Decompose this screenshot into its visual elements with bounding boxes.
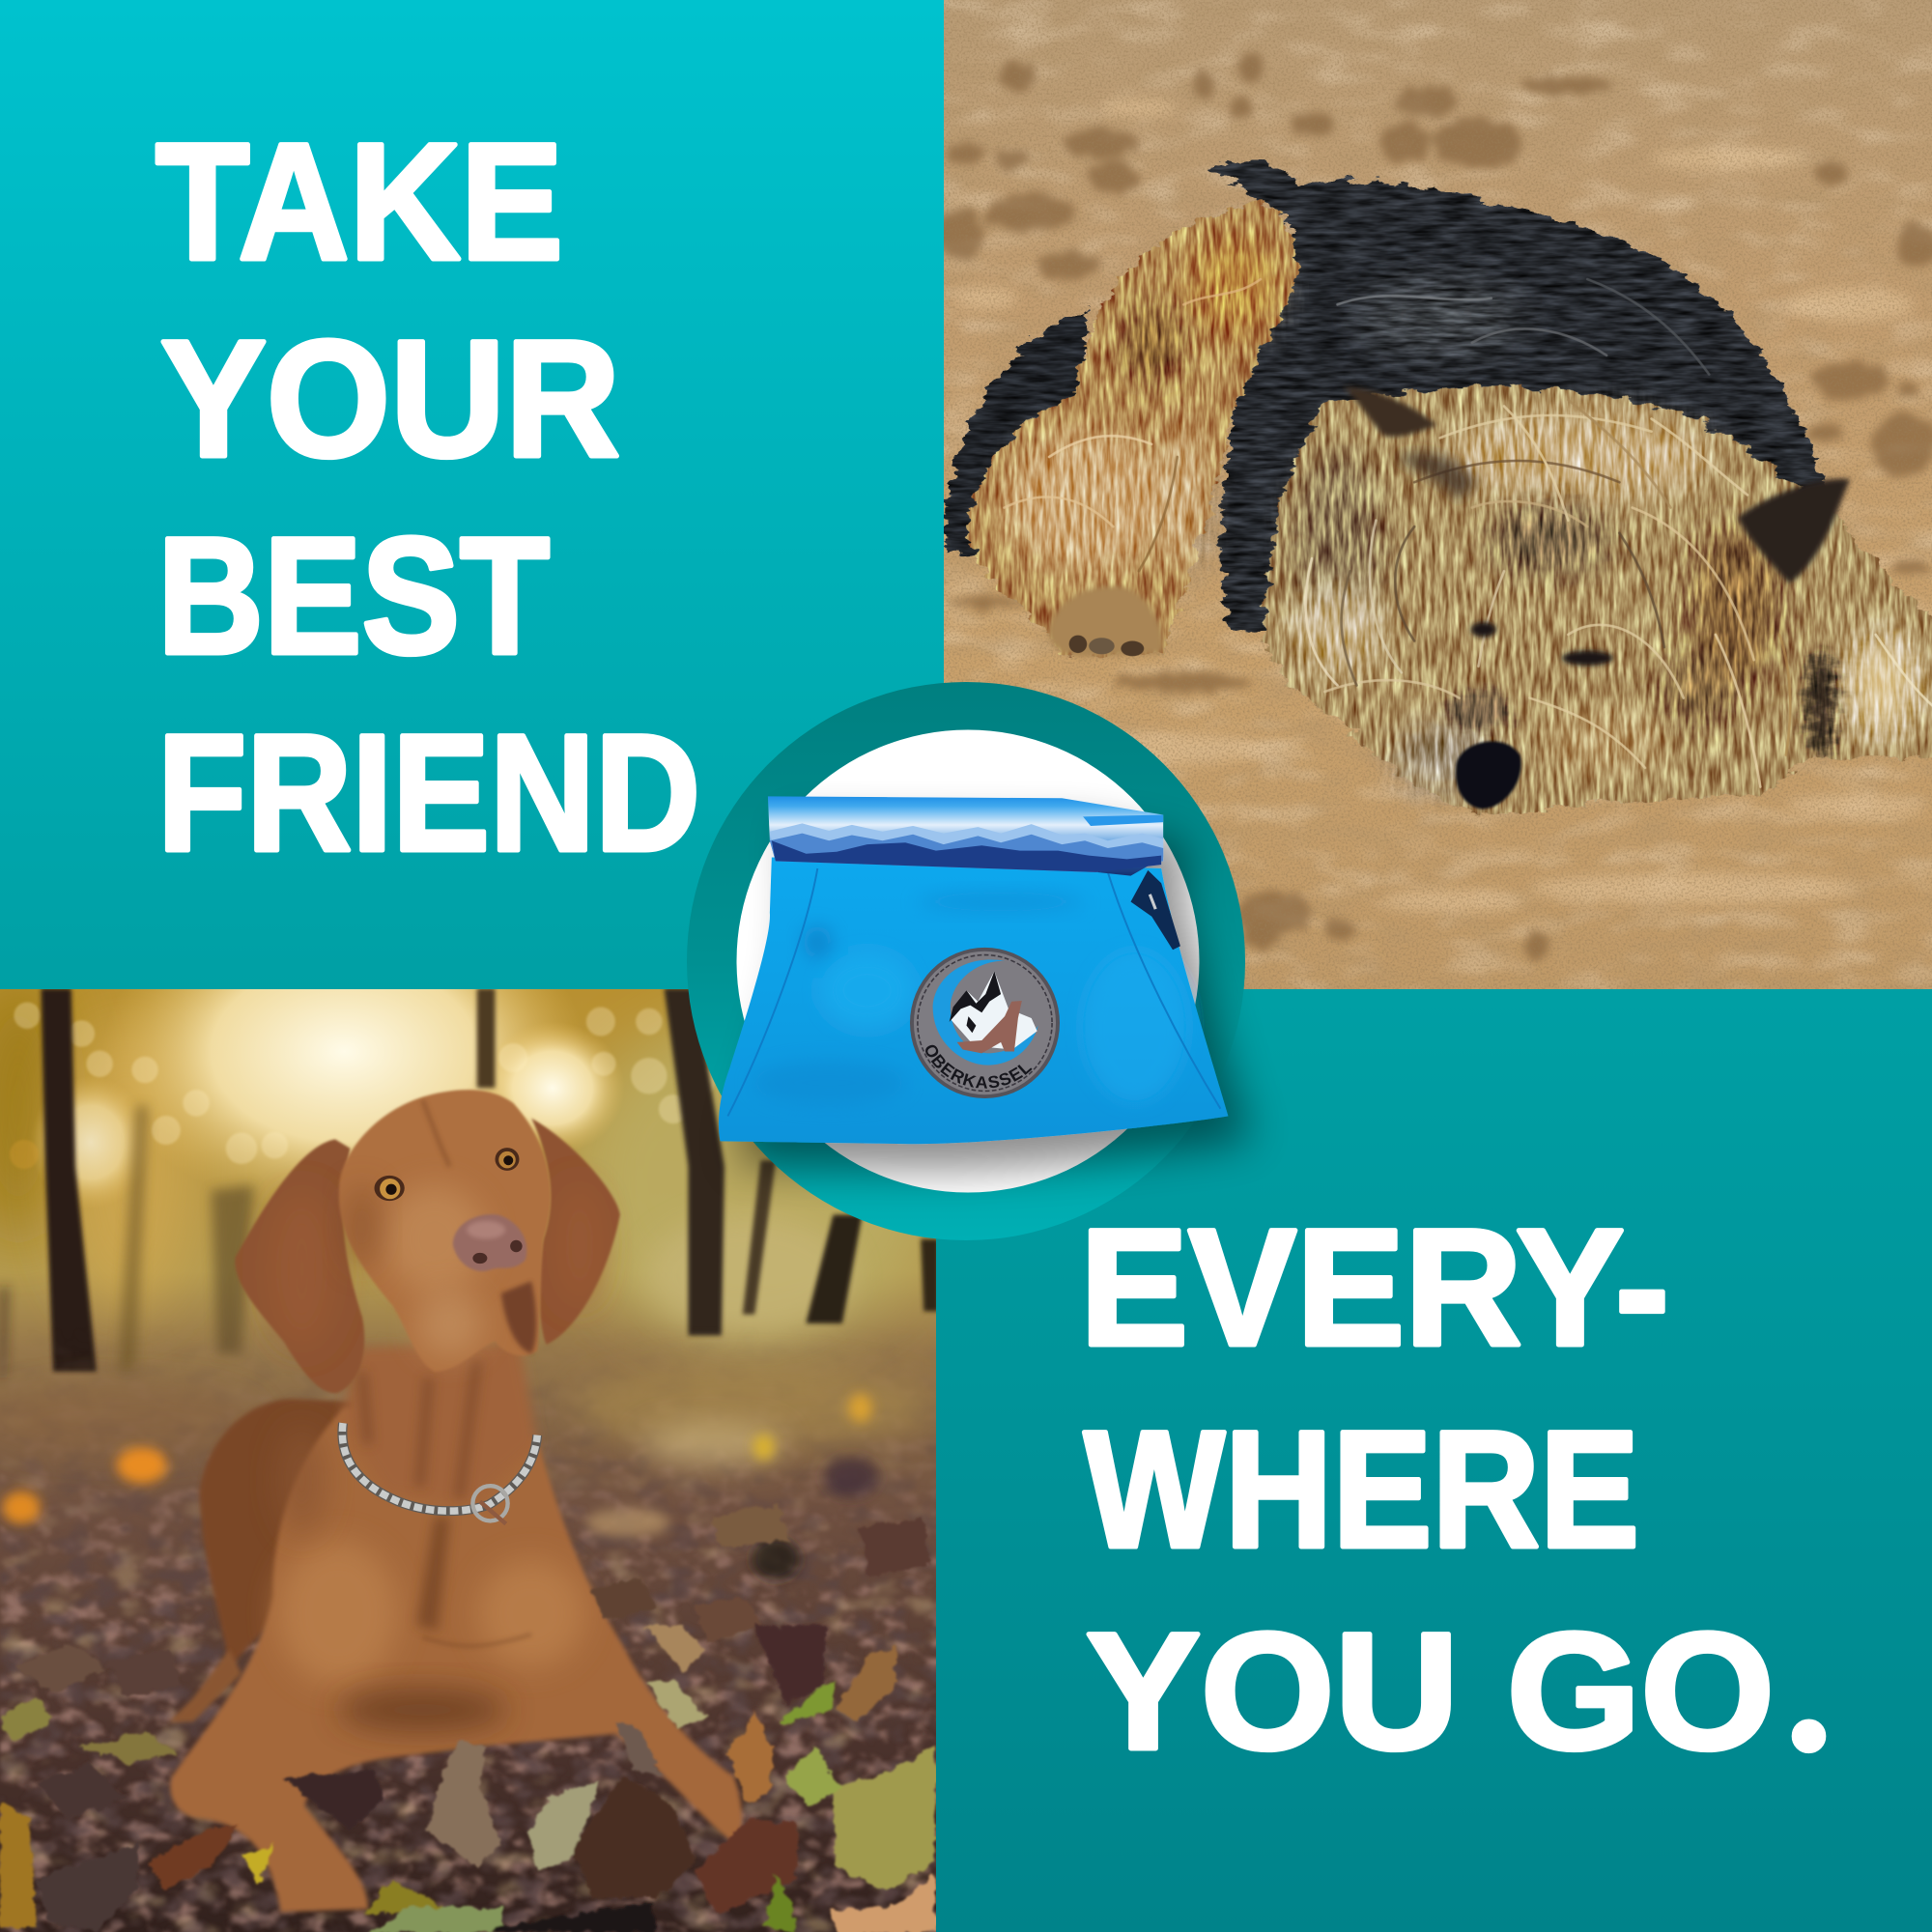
heading: take your best friend: FRIEND bbox=[157, 700, 700, 886]
heading: everywhere you go: YOU GO bbox=[1086, 1599, 1775, 1784]
heading: take your best friend: BEST bbox=[157, 503, 550, 689]
white inner circle bbox=[736, 730, 1200, 1192]
logo wordmark bbox=[923, 1048, 1043, 1089]
heading: everywhere you go: EVERY- bbox=[1080, 1195, 1669, 1380]
logo howling dog bbox=[957, 1001, 1022, 1053]
logo crescent moon bbox=[933, 959, 1038, 1065]
round logo patch bbox=[910, 947, 1060, 1098]
heading: everywhere you go bbox=[1080, 1195, 1835, 1797]
vizsla head bbox=[339, 1090, 551, 1372]
heading: take your best friend bbox=[156, 109, 700, 886]
vizsla body bbox=[169, 1342, 742, 1912]
vizsla eyes bbox=[375, 1148, 520, 1201]
photo: vizsla dog in autumn leaves bbox=[0, 889, 942, 1932]
vizsla chain collar bbox=[342, 1423, 537, 1524]
photo: dog sleeping on sand bbox=[927, 0, 1932, 1015]
forest background bbox=[0, 889, 942, 1932]
foreground leaves bbox=[0, 1505, 936, 1932]
vizsla nose bbox=[453, 1214, 526, 1271]
tan haunch fur bbox=[966, 203, 1299, 654]
sand ground bbox=[927, 0, 1932, 1015]
dog eyes and nose bbox=[1456, 622, 1613, 810]
logo mountains bbox=[950, 971, 1037, 1050]
black body fur bbox=[946, 159, 1825, 635]
head and mane bbox=[1264, 386, 1932, 815]
product: blue treat pouch bbox=[719, 795, 1267, 1182]
vizsla ears bbox=[235, 1119, 620, 1393]
heading: everywhere you go: WHERE bbox=[1084, 1397, 1639, 1582]
dog ears bbox=[1344, 387, 1850, 583]
pouch body bbox=[719, 858, 1228, 1144]
heading: take your best friend: TAKE bbox=[156, 109, 563, 295]
pouch zipper pull bbox=[1131, 870, 1180, 950]
pouch rim with mountain print bbox=[768, 796, 1163, 876]
heading: take your best friend: YOUR bbox=[160, 306, 620, 492]
round logo patch: OBERKASSEL bbox=[925, 1045, 1032, 1089]
paw bbox=[1049, 586, 1163, 657]
heading: everywhere you go: . bbox=[1782, 1561, 1835, 1797]
dog fur streaks bbox=[1005, 279, 1932, 787]
central ring circle bbox=[687, 682, 1245, 1240]
